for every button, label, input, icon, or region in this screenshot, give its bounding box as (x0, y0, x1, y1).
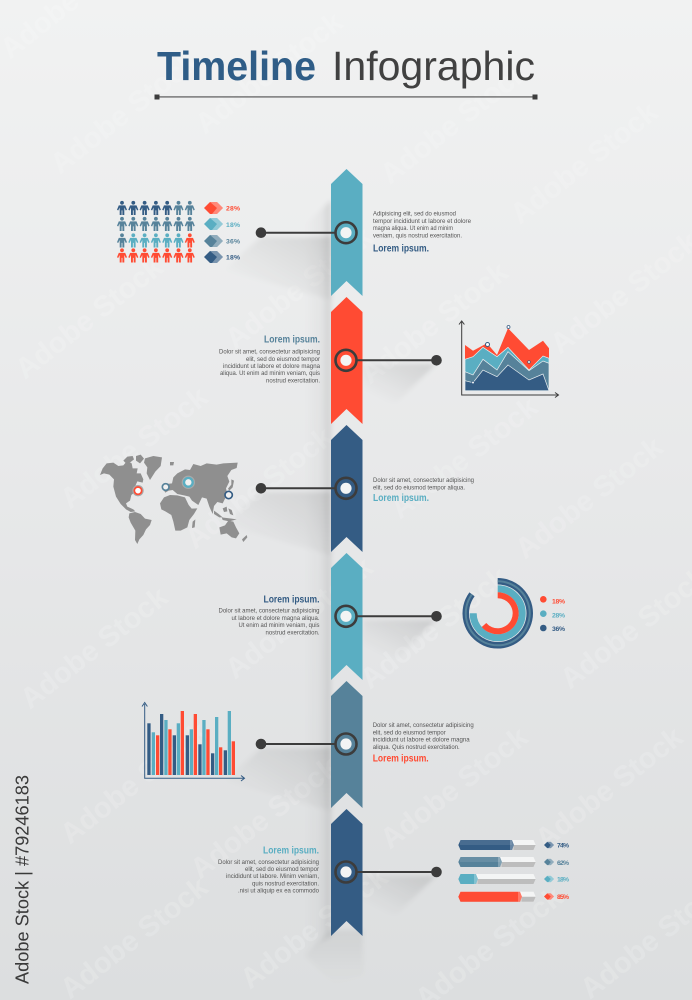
watermark: Adobe Stock (385, 391, 545, 526)
watermark: Adobe Stock (45, 46, 205, 181)
text block 3 (373, 477, 475, 504)
text block 1: magna aliqua. Ut enim ad minim (373, 225, 453, 232)
text block 6: Lorem ipsum. (263, 844, 319, 856)
watermark: Adobe Stock (180, 421, 340, 556)
text block 2 (219, 334, 321, 384)
connector 5 (256, 734, 356, 754)
text block 4: Lorem ipsum. (264, 594, 320, 606)
text block 5: elit, sed do eiusmod tempor (373, 729, 446, 736)
donut legend: 36% (552, 626, 565, 633)
watermark: Adobe Stock (220, 221, 380, 356)
text block 6: elit, sed do eiusmod tempor (245, 866, 319, 873)
connector 2 (336, 350, 442, 371)
text block 5 (373, 722, 474, 764)
progress bars (458, 840, 536, 902)
people chart legend: 18% (226, 254, 240, 262)
title (154, 43, 538, 100)
stock id side label: Adobe Stock | #79246183 (12, 775, 32, 984)
text block 1: veniam, quis nostrud exercitation. (373, 232, 462, 239)
watermark: Adobe Stock (15, 581, 175, 716)
text block 2: nostrud exercitation. (266, 377, 320, 384)
watermark: Adobe Stock (375, 721, 535, 856)
connector 1 (256, 222, 356, 243)
donut legend (540, 596, 565, 633)
watermark: Adobe Stock (355, 256, 515, 391)
progress legend: 62% (557, 860, 569, 867)
donut legend: 18% (552, 598, 565, 605)
people chart legend: 18% (226, 222, 240, 229)
connector 4 (336, 606, 442, 627)
title: Infographic (332, 43, 535, 89)
text block 3: Lorem ipsum. (373, 492, 429, 504)
people chart legend (204, 202, 240, 263)
donut chart (466, 581, 530, 645)
text block 5: Lorem ipsum. (373, 752, 429, 764)
watermark: Adobe Stock (510, 431, 670, 566)
watermark: Adobe Stock (185, 751, 345, 886)
text block 1: Lorem ipsum. (373, 242, 429, 254)
text block 1: tempor incididunt ut labore et dolore (373, 218, 472, 225)
text block 4: ut labore et dolore magna aliqua. (232, 615, 320, 622)
ribbon shadows (225, 200, 436, 985)
watermark: Adobe Stock (355, 561, 515, 696)
watermark: Adobe Stock (220, 551, 380, 686)
watermark: Adobe Stock (235, 861, 395, 996)
donut legend: 28% (552, 612, 565, 620)
watermark: Adobe Stock (375, 56, 535, 191)
timeline ribbon segments (331, 169, 362, 936)
text block 5: Dolor sit amet, consectetur adipisicing (373, 722, 474, 729)
watermark: Adobe Stock (190, 6, 350, 141)
text block 3: elit, sed do eiusmod tempor aliqua. (373, 484, 465, 491)
text block 3: Dolor sit amet, consectetur adipisicing (373, 477, 475, 484)
text block 1 (373, 211, 472, 254)
text block 4: Dolor sit amet, consectetur adipisicing (218, 608, 320, 615)
people chart legend: 28% (226, 206, 240, 212)
bar chart (142, 702, 244, 781)
people chart legend: 36% (226, 238, 240, 245)
text block 2: elit, sed do eiusmod tempor (246, 356, 320, 363)
world map (100, 455, 247, 544)
text block 2: aliqua. Ut enim ad minim veniam, quis (220, 370, 320, 377)
people pictogram chart (117, 201, 195, 262)
text block 6: Dolor sit amet, consectetur adipisicing (218, 859, 320, 866)
progress legend: 74% (557, 842, 569, 850)
connector 3 (256, 478, 356, 499)
text block 5: aliqua. Quis nostrud exercitation. (373, 744, 460, 751)
text block 1: Adipisicing elit, sed do eiusmod (373, 211, 457, 218)
title: Timeline (157, 43, 316, 89)
progress legend: 85% (557, 894, 569, 901)
text block 2: incididunt ut labore et dolore magna (223, 363, 321, 370)
text block 4: nostrud exercitation. (266, 629, 320, 636)
text block 4: Ut enim ad minim veniam, quis (238, 622, 320, 629)
text block 5: incididunt ut labore et dolore magna (373, 736, 470, 744)
watermark: Adobe Stock (530, 721, 690, 856)
text block 6 (218, 844, 320, 894)
area chart (459, 321, 558, 398)
text block 6: .nisi ut aliquip ex ea commodo (238, 887, 320, 894)
connector 6 (336, 862, 442, 882)
watermark: Adobe Stock (55, 381, 215, 516)
watermark: Adobe Stock (505, 96, 665, 231)
text block 4 (218, 594, 320, 636)
watermark: Adobe Stock (55, 716, 215, 851)
text block 6: quis nostrud exercitation. (252, 880, 319, 887)
text block 2: Dolor sit amet, consectetur adipisicing (219, 349, 321, 356)
progress legend (544, 842, 569, 901)
text block 6: incididunt ut labore. Minim veniam, (226, 873, 319, 880)
watermark: Adobe Stock (10, 251, 170, 386)
progress legend: 18% (557, 877, 569, 884)
text block 2: Lorem ipsum. (264, 334, 320, 346)
